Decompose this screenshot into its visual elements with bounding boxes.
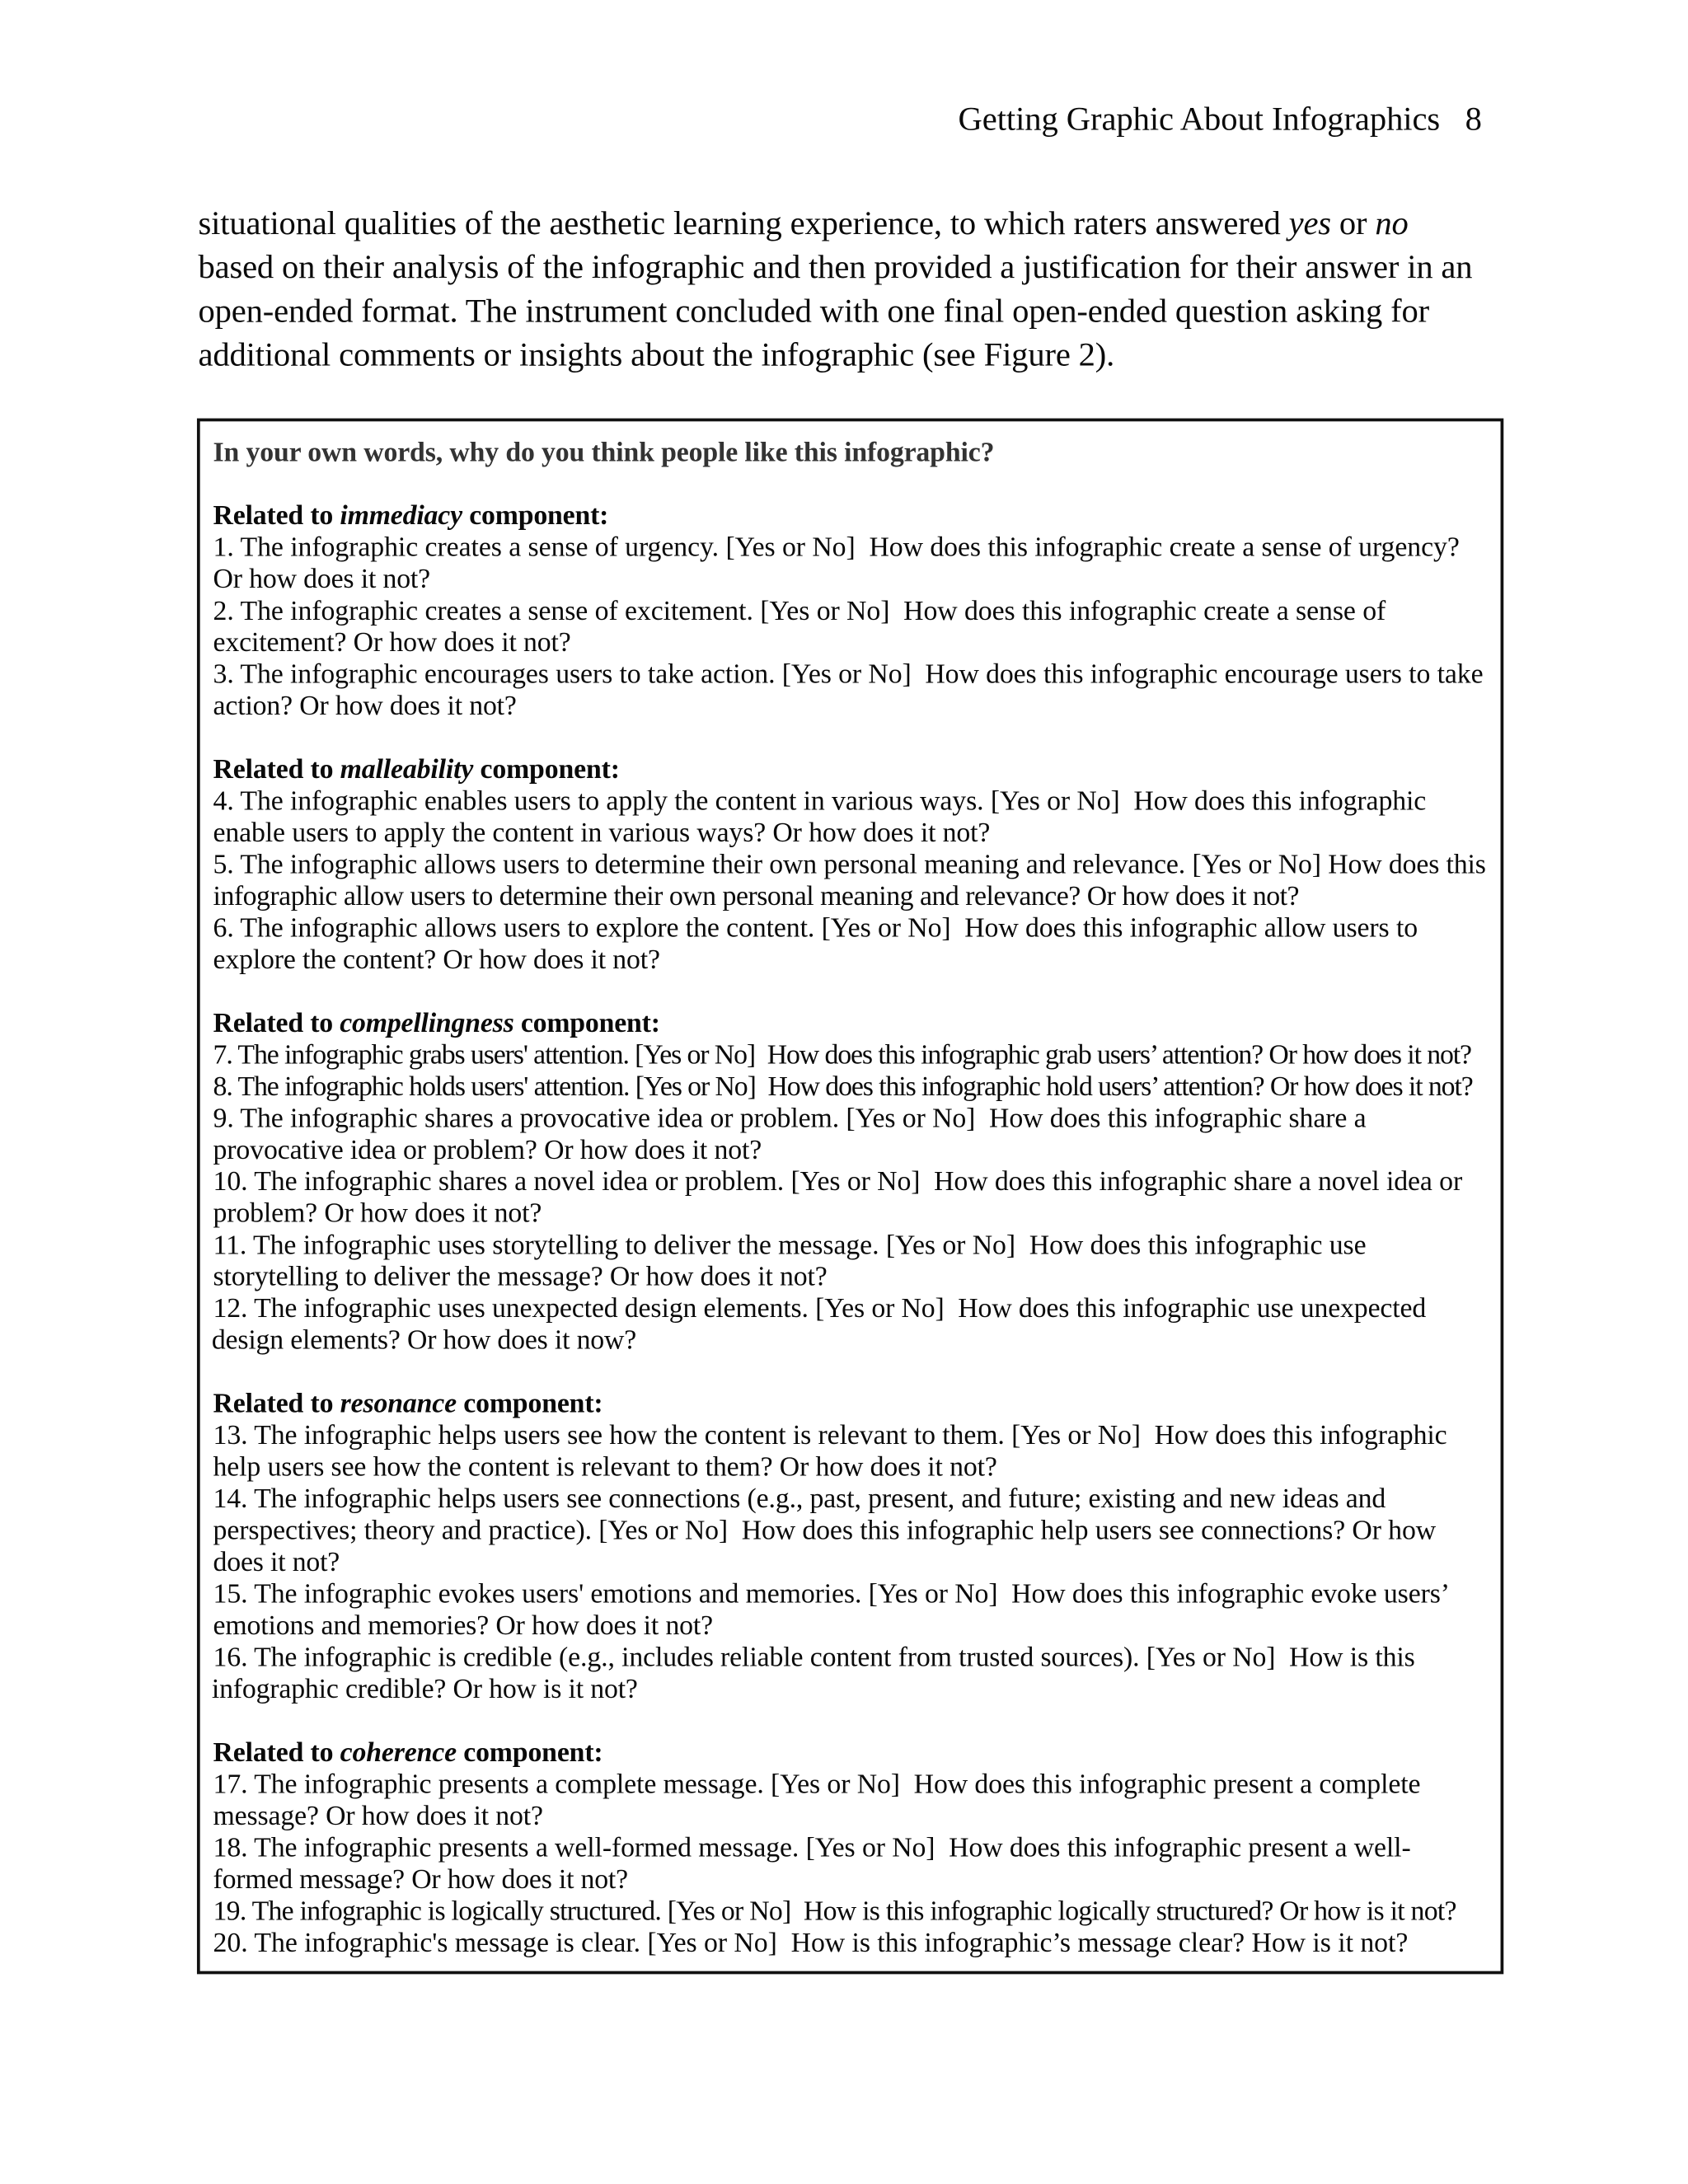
panel: rater questionnaire figure (199, 419, 1502, 1972)
section: immediacy questions (213, 500, 1484, 721)
section: malleability questions: enable users to apply the content in various ways? Or how does it not? (213, 818, 990, 848)
section: resonance questions: infographic credible? Or how is it not? (212, 1674, 638, 1704)
intro paragraph: based on their analysis of the infographic and then provided a justification for their answer in an (198, 248, 1473, 285)
section: resonance questions: help users see how the content is relevant to them? Or how does it not? (213, 1451, 997, 1482)
intro paragraph (198, 204, 1473, 373)
section: immediacy questions: excitement? Or how does it not? (213, 627, 571, 658)
section: resonance questions (212, 1389, 1450, 1704)
section: coherence questions: 17. The infographic presents a complete message. [Yes or No] How does this infographic present a complete (213, 1769, 1421, 1800)
section: resonance questions: Related to resonance component: (213, 1389, 603, 1419)
opening open-ended question: In your own words, why do you think people like this infographic? (213, 437, 994, 467)
section: immediacy questions: Related to immediacy component: (213, 500, 608, 531)
section: immediacy questions: 1. The infographic creates a sense of urgency. [Yes or No] How does this infographic create a sense of urgency? (213, 532, 1460, 563)
section: coherence questions: 20. The infographic's message is clear. [Yes or No] How is this infographic’s message clear? How is it not? (213, 1928, 1408, 1958)
section: immediacy questions: 3. The infographic encourages users to take action. [Yes or No] How does this infographic encourage users to take (213, 659, 1484, 690)
section: coherence questions: message? Or how does it not? (213, 1801, 543, 1831)
section: compellingness questions: Related to compellingness component: (213, 1008, 660, 1038)
section: compellingness questions: 9. The infographic shares a provocative idea or problem. [Yes or No] How does this infographic share a (213, 1103, 1367, 1133)
intro paragraph: open-ended format. The instrument concluded with one final open-ended question asking for (198, 292, 1430, 329)
section: compellingness questions: 12. The infographic uses unexpected design elements. [Yes or No] How does this infographic use unexpected (213, 1293, 1426, 1324)
section: compellingness questions: 8. The infographic holds users' attention. [Yes or No] How does this infographic hold users’ attention? Or how does it not? (213, 1071, 1474, 1102)
section: malleability questions: infographic allow users to determine their own personal meaning and relevance? Or how does it not? (213, 881, 1300, 912)
section: malleability questions: 6. The infographic allows users to explore the content. [Yes or No] How does this infographic allow users to (213, 913, 1418, 944)
section: resonance questions: 13. The infographic helps users see how the content is relevant to them. [Yes or No] How does this infographic (213, 1420, 1447, 1451)
section: malleability questions: explore the content? Or how does it not? (213, 944, 660, 975)
page header: running title and page number: Getting Graphic About Infographics (959, 101, 1440, 138)
section: compellingness questions: design elements? Or how does it now? (212, 1325, 636, 1356)
section: coherence questions: formed message? Or how does it not? (213, 1864, 628, 1895)
section: malleability questions (213, 754, 1486, 975)
panel frame (199, 419, 1502, 1972)
section: compellingness questions: problem? Or how does it not? (213, 1198, 542, 1229)
section: malleability questions: 4. The infographic enables users to apply the content in various ways. [Yes or No] How does this infographic (213, 786, 1426, 817)
section: coherence questions (213, 1737, 1456, 1958)
section: resonance questions: perspectives; theory and practice). [Yes or No] How does this infographic help users see connections? Or how (213, 1515, 1437, 1545)
section: resonance questions: does it not? (213, 1547, 340, 1577)
section: immediacy questions: 2. The infographic creates a sense of excitement. [Yes or No] How does this infographic create a sense of (213, 596, 1386, 626)
section: malleability questions: 5. The infographic allows users to determine their own personal meaning and relevance. [Yes or No] How does this (213, 849, 1486, 879)
section: coherence questions: 18. The infographic presents a well-formed message. [Yes or No] How does this infographic present a well- (213, 1833, 1411, 1863)
intro paragraph: additional comments or insights about the infographic (see Figure 2). (198, 336, 1114, 373)
section: compellingness questions: 10. The infographic shares a novel idea or problem. [Yes or No] How does this infographic share a novel idea or (213, 1166, 1462, 1197)
section: immediacy questions: action? Or how does it not? (213, 691, 517, 721)
section: compellingness questions: 11. The infographic uses storytelling to deliver the message. [Yes or No] How does this infographic use (213, 1230, 1367, 1260)
section: compellingness questions: storytelling to deliver the message? Or how does it not? (213, 1262, 828, 1292)
section: compellingness questions: provocative idea or problem? Or how does it not? (213, 1135, 762, 1165)
section: compellingness questions (212, 1008, 1474, 1356)
section: resonance questions: 14. The infographic helps users see connections (e.g., past, present, and future; existing and new ideas and (213, 1483, 1386, 1514)
page header: running title and page number: 8 (1465, 101, 1482, 138)
section: malleability questions: Related to malleability component: (213, 754, 620, 785)
section: compellingness questions: 7. The infographic grabs users' attention. [Yes or No] How does this infographic grab users’ attention? Or how does it not? (213, 1039, 1472, 1070)
section: immediacy questions: Or how does it not? (213, 564, 430, 594)
section: coherence questions: Related to coherence component: (213, 1737, 603, 1768)
section: coherence questions: 19. The infographic is logically structured. [Yes or No] How is this infographic logically structured? Or how is it not? (213, 1896, 1456, 1926)
section: resonance questions: 16. The infographic is credible (e.g., includes reliable content from trusted sources). [Yes or No] How is this (213, 1642, 1415, 1672)
section: resonance questions: 15. The infographic evokes users' emotions and memories. [Yes or No] How does this infographic evoke users’ (213, 1578, 1450, 1609)
section: resonance questions: emotions and memories? Or how does it not? (213, 1610, 713, 1641)
intro paragraph: situational qualities of the aesthetic learning experience, to which raters answered yes or no (198, 204, 1409, 241)
